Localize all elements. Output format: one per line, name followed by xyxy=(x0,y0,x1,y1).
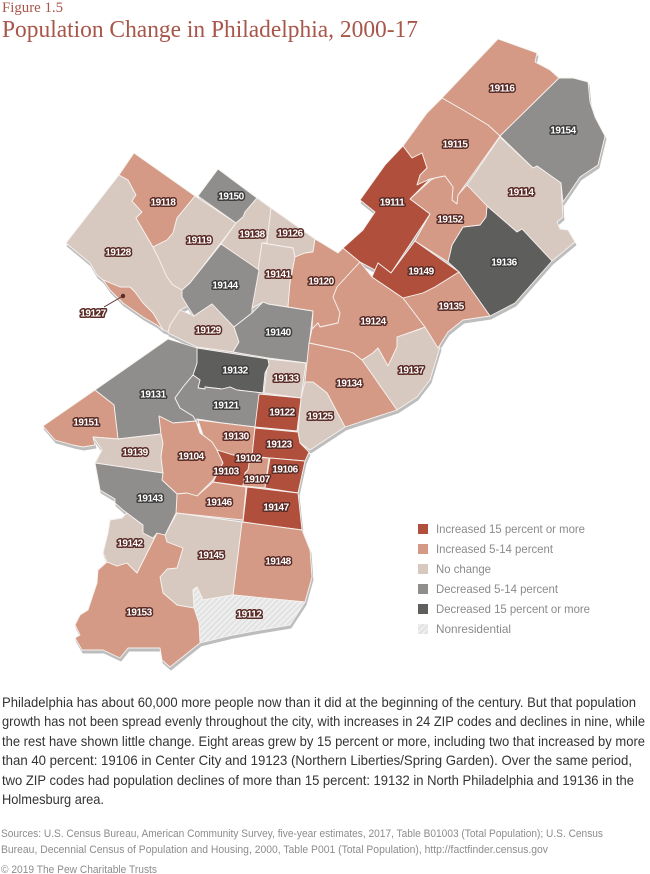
ZIP code labels: 19134 xyxy=(336,378,363,390)
ZIP code labels: 19131 xyxy=(140,390,167,400)
legend: No change xyxy=(436,562,491,576)
ZIP code labels: 19112 xyxy=(236,610,262,620)
ZIP code labels: 19139 xyxy=(122,448,149,458)
legend: Increased 15 percent or more xyxy=(436,522,585,536)
leader line for 19127 xyxy=(104,294,125,307)
ZIP code labels: 19121 xyxy=(213,400,240,412)
ZIP code labels: 19135 xyxy=(438,302,465,312)
ZIP code labels: 19107 xyxy=(244,474,271,486)
body paragraph: Holmesburg area. xyxy=(2,792,104,807)
sources: Sources: U.S. Census Bureau, American Community Survey, five-year estimates, 2017, Table B01003 (Total Population); U.S. Census xyxy=(1,828,603,840)
ZIP code labels: 19119 xyxy=(186,236,212,246)
ZIP code labels: 19128 xyxy=(105,248,132,258)
ZIP code labels: 19102 xyxy=(235,454,262,464)
ZIP code labels: 19146 xyxy=(206,498,233,508)
ZIP code labels xyxy=(73,84,577,620)
ZIP code labels: 19133 xyxy=(273,374,300,384)
ZIP code labels: 19130 xyxy=(223,432,250,442)
ZIP code labels: 19125 xyxy=(307,412,334,422)
ZIP code labels: 19153 xyxy=(126,608,153,618)
ZIP code labels: 19141 xyxy=(265,270,292,280)
ZIP code labels: 19151 xyxy=(73,418,100,428)
ZIP code labels: 19122 xyxy=(269,408,296,418)
ZIP code labels: 19111 xyxy=(380,198,405,208)
ZIP code labels: 19118 xyxy=(150,198,176,208)
ZIP code labels: 19127 xyxy=(80,308,107,320)
ZIP code labels: 19143 xyxy=(137,494,164,504)
ZIP code labels: 19149 xyxy=(408,266,435,278)
ZIP code labels: 19138 xyxy=(239,230,266,240)
ZIP code labels: 19147 xyxy=(263,502,290,514)
map of ZIP codes xyxy=(43,39,605,667)
ZIP code labels: 19129 xyxy=(195,326,222,336)
ZIP code labels: 19142 xyxy=(117,538,144,550)
ZIP code labels: 19136 xyxy=(491,258,518,268)
body paragraph: than 40 percent: 19106 in Center City and 19123 (Northern Liberties/Spring Garden). Over the same period, xyxy=(2,753,632,768)
ZIP code labels: 19115 xyxy=(442,140,468,150)
ZIP code labels: 19150 xyxy=(218,192,245,202)
ZIP code labels: 19132 xyxy=(222,366,249,376)
ZIP code labels: 19103 xyxy=(213,466,240,478)
ZIP code areas xyxy=(43,39,605,667)
ZIP code labels: 19152 xyxy=(437,214,464,226)
ZIP code labels: 19120 xyxy=(308,276,335,288)
body paragraph: Philadelphia has about 60,000 more people now than it did at the beginning of the century. But that population xyxy=(2,695,636,710)
legend: Decreased 15 percent or more xyxy=(436,602,590,616)
figure number: Figure 1.5 xyxy=(2,0,63,16)
body paragraph xyxy=(2,695,645,807)
ZIP code labels: 19106 xyxy=(272,464,299,476)
ZIP code labels: 19114 xyxy=(508,188,534,198)
ZIP code labels: 19123 xyxy=(266,440,293,450)
sources: Bureau, Decennial Census of Population and Housing, 2000, Table P001 (Total Population), http://factfinder.census.gov xyxy=(1,844,548,856)
ZIP code labels: 19124 xyxy=(360,316,387,328)
ZIP code labels: 19140 xyxy=(265,328,292,338)
legend: Increased 5-14 percent xyxy=(436,542,554,556)
legend xyxy=(418,522,590,636)
ZIP code labels: 19144 xyxy=(212,280,239,292)
ZIP code labels: 19116 xyxy=(489,84,515,94)
ZIP code labels: 19148 xyxy=(265,556,292,568)
ZIP code labels: 19154 xyxy=(550,126,577,136)
title: Population Change in Philadelphia, 2000-17 xyxy=(2,17,418,43)
ZIP code labels: 19104 xyxy=(178,452,205,462)
ZIP code labels: 19137 xyxy=(398,366,425,376)
legend: Decreased 5-14 percent xyxy=(436,582,559,596)
sources xyxy=(1,828,603,856)
ZIP code labels: 19145 xyxy=(198,550,225,562)
ZIP code labels: 19126 xyxy=(277,228,304,240)
body paragraph: two ZIP codes had population declines of more than 15 percent: 19132 in North Philadelphia and 19136 in the xyxy=(2,773,634,788)
legend: Nonresidential xyxy=(436,622,511,636)
